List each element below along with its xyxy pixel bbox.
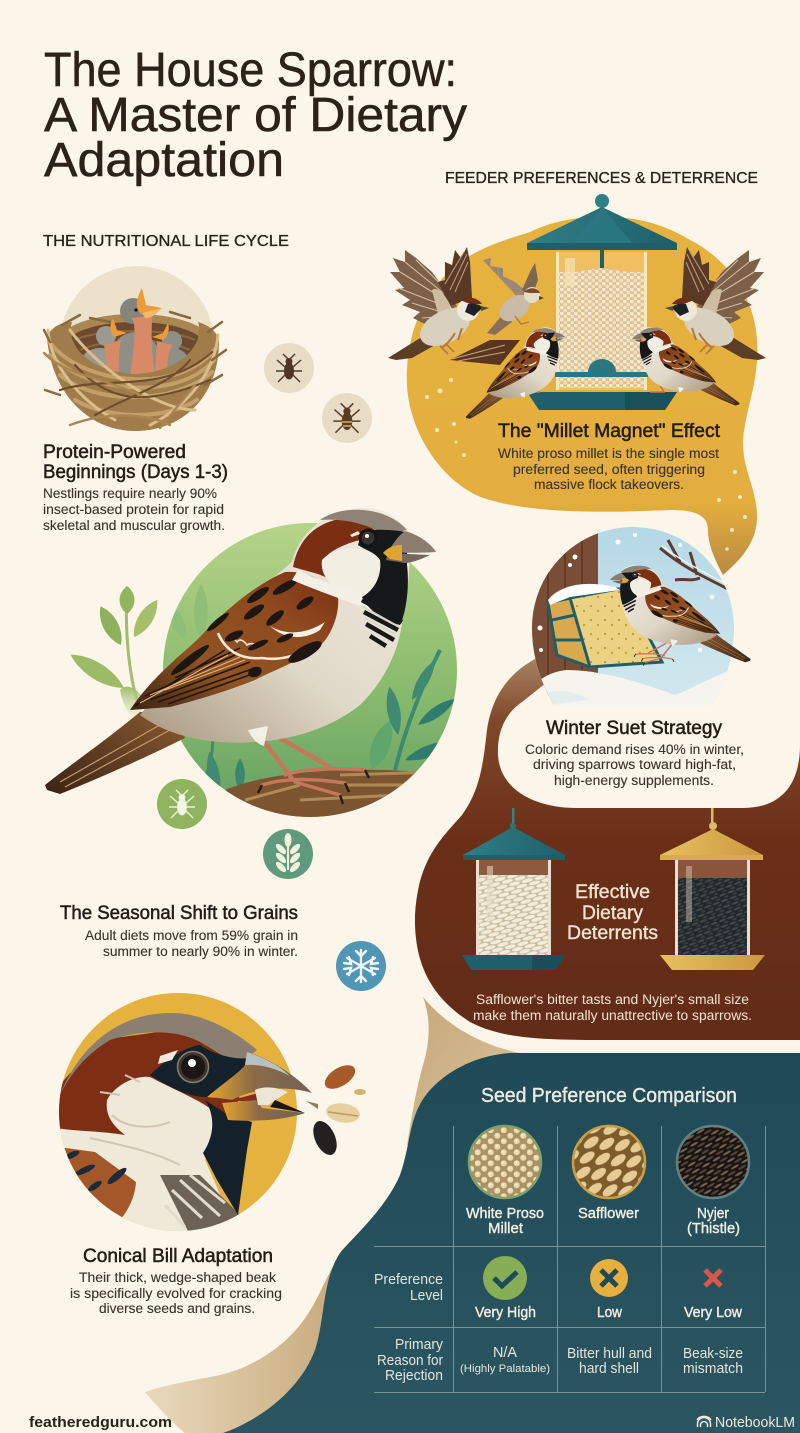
seed: nyjer: (Thistle) [687,1221,740,1237]
panel: seed preference comparison [374,1084,766,1392]
chicks [81,288,189,388]
footer: NotebookLM mark: NotebookLM [715,1415,795,1431]
icon: very high check [475,1256,536,1321]
text: winter suet strategy [525,718,744,788]
heading: effective dietary deterrents: Deterrents [567,922,658,944]
heading: nutritional life cycle: THE NUTRITIONAL LIFE CYCLE [43,233,289,250]
panel: millet magnet [388,194,766,575]
seed: white proso millet: White Proso [466,1206,544,1222]
perched sparrow left [450,325,574,419]
seed: white proso millet: Millet [488,1221,523,1237]
icon: very low cross [684,1270,743,1321]
text: protein-powered beginnings: Protein-Powered [43,442,186,463]
icon: snowflake badge [336,941,386,991]
text: protein-powered beginnings: skeletal and muscular growth. [43,518,225,533]
flying sparrows [388,247,766,360]
icon: insect two [322,393,372,443]
heading: effective dietary deterrents [567,881,658,944]
title: A Master of Dietary [44,89,467,142]
panel: winter text bubble [498,640,800,808]
heading: effective dietary deterrents: Effective [575,881,650,903]
feeder [527,194,677,410]
text: protein-powered beginnings: Nestlings require nearly 90% [43,486,217,501]
illustration: plant sprig [66,586,163,720]
text: seasonal shift to grains [60,903,298,959]
cell: safflower reason: hard shell [579,1361,639,1377]
text: protein-powered beginnings [43,442,228,533]
illustration: house sparrow [45,508,436,804]
title: Adaptation [44,134,284,187]
seed: white proso millet [466,1126,544,1237]
illustration: nyjer feeder [660,808,765,970]
text: deterrent explanation: make them naturally unattrective to sparrows. [473,1008,752,1023]
seed dots [425,378,747,551]
heading: effective dietary deterrents: Dietary [582,902,643,924]
text: deterrent explanation [473,992,752,1023]
row label: primary reason for rejection: Rejection [385,1368,443,1384]
text: conical bill adaptation: Conical Bill Adaptation [83,1246,273,1267]
icon: insect one [264,343,314,393]
seeds [306,1060,366,1159]
cell: nyjer reason: mismatch [683,1361,743,1377]
text: protein-powered beginnings: insect-based protein for rapid [43,502,224,517]
panel: seed preference background [223,1053,800,1433]
text: winter suet strategy: Winter Suet Strategy [546,718,723,739]
footer: source: featheredguru.com [29,1414,172,1431]
text: seasonal shift to grains: The Seasonal Shift to Grains [60,903,298,924]
seed: nyjer [677,1126,749,1237]
millet body: preferred seed, often triggering [513,462,705,477]
row label: preference level [374,1272,443,1304]
millet heading: The "Millet Magnet" Effect [498,421,721,442]
panel: decorative tan swoosh [145,997,525,1433]
row label: primary reason for rejection: Primary [395,1337,444,1353]
illustration: bird head with bill [40,993,366,1240]
branch [225,770,416,817]
text: seasonal shift to grains: Adult diets move from 59% grain in [85,928,298,943]
cell: nyjer reason [683,1346,743,1377]
row label: primary reason for rejection [377,1337,444,1384]
nest bowl [47,322,219,431]
icon: very high check: Very High [475,1305,536,1321]
panel: winter to deterrents brown background [415,640,800,1040]
text: protein-powered beginnings: Beginnings (Days 1-3) [43,462,228,483]
heading: feeder preferences: FEEDER PREFERENCES & DETERRENCE [445,170,758,187]
cell: millet reason [460,1345,550,1375]
title: The House Sparrow: [44,44,457,97]
row label: preference level: Preference [374,1272,443,1288]
text: winter suet strategy: driving sparrows toward high-fat, [533,757,736,772]
row label: primary reason for rejection: Reason for [377,1353,443,1369]
cell: millet reason: N/A [493,1345,517,1361]
millet body: White proso millet is the single most [498,446,719,461]
millet body [498,446,719,492]
icon: low cross: Low [597,1305,622,1321]
text: winter suet strategy: high-energy supplements. [554,773,714,788]
cell: safflower reason: Bitter hull and [567,1346,652,1362]
table heading: Seed Preference Comparison [481,1084,737,1107]
text: conical bill adaptation: is specifically evolved for cracking [70,1286,282,1301]
illustration: safflower feeder [462,808,565,970]
illustration: winter suet scene [532,527,751,705]
text: winter suet strategy: Coloric demand rises 40% in winter, [525,742,744,757]
small flying sparrow [483,258,544,335]
text: seasonal shift to grains: summer to nearly 90% in winter. [103,944,298,959]
text: deterrent explanation: Safflower's bitter tasts and Nyjer's small size [476,992,749,1007]
icon: very low cross: Very Low [684,1305,743,1321]
snow mound [542,670,727,705]
text: conical bill adaptation: Their thick, wedge-shaped beak [79,1270,276,1285]
illustration: nest with chicks [44,266,226,431]
cell: safflower reason [567,1346,652,1377]
cell: millet reason: (Highly Palatable) [460,1363,550,1375]
bill [207,1052,312,1100]
perched sparrow right [632,327,740,406]
seed: safflower [573,1126,645,1222]
yellow blob [407,216,757,575]
icon: low cross [590,1259,628,1321]
cell: nyjer reason: Beak-size [683,1346,743,1362]
millet body: massive flock takeovers. [534,477,684,492]
icon: wheat badge [263,829,313,879]
illustration: green circle scene [163,523,461,830]
icon: green insect badge [157,779,207,829]
winter sparrow [610,565,751,666]
text: conical bill adaptation: diverse seeds and grains. [99,1301,255,1316]
row label: preference level: Level [410,1288,443,1304]
seed: safflower: Safflower [578,1206,639,1222]
title [44,44,467,187]
text: conical bill adaptation [70,1246,282,1316]
seed: nyjer: Nyjer [697,1206,729,1222]
suet cage [548,584,662,667]
